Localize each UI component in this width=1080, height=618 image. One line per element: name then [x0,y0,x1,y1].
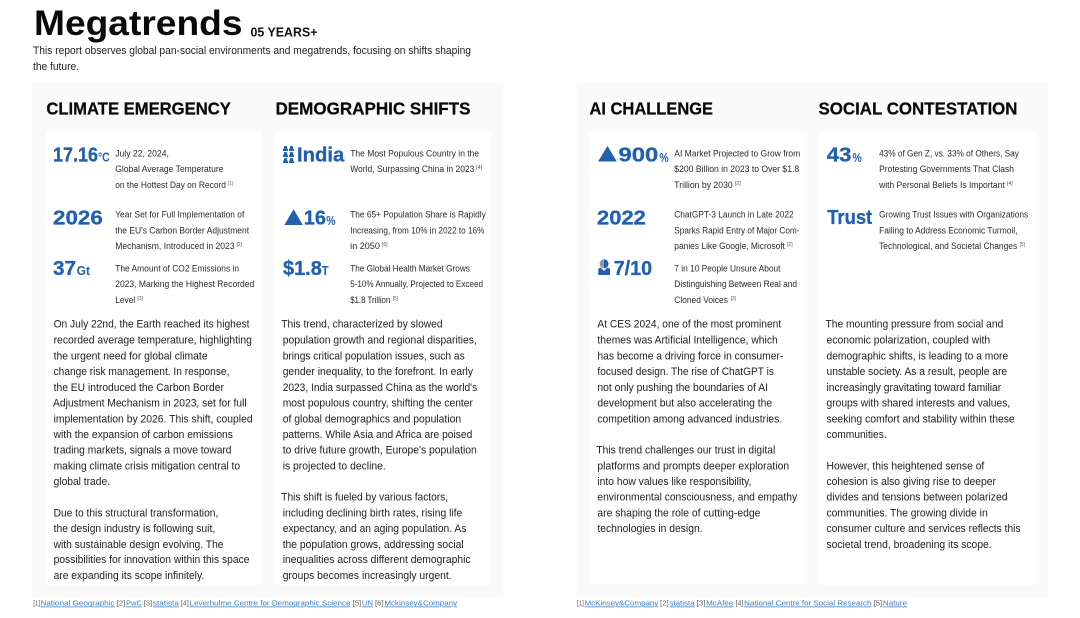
footnotes: left: [4] [181,598,189,608]
body text: demographic: population growth and regional disparities, [283,334,477,346]
stat: 1.8 trillion: [5] [393,296,398,302]
footnotes: left: [2] [117,598,125,608]
header [33,4,471,73]
body text: social: societal trend, broadening its scope. [826,539,992,551]
stat: 2022: ChatGPT-3 Launch in Late 2022 [674,210,794,220]
stat: 16 percent [284,206,486,251]
footnotes: left: PwC [126,598,142,608]
body text: social: However, this heightened sense of [826,460,985,472]
stat: 37 Gt: Level [115,295,135,305]
heading: social contestation: SOCIAL CONTESTATION [818,98,1018,118]
body text: demographic: 2023, India surpassed China as the world's [283,382,478,394]
stat: 17.16 degrees [53,144,233,190]
body text: demographic: to drive future growth, Europe's population [283,444,477,456]
stat: 17.16 degrees: 17.16 [53,144,98,166]
body text: demographic: groups becomes increasingly urgent. [283,570,452,582]
body text: AI: environmental consciousness, and empathy [597,492,798,504]
stat: 43 percent: [4] [1007,181,1013,187]
body text: demographic: gender inequality, to the forefront. In early [283,366,474,378]
stat: 37 Gt: 2023, Marking the Highest Recorded [115,279,254,289]
stat: 1.8 trillion: $1.8 Trillion [350,295,390,305]
stat: 1.8 trillion: $1.8 [283,257,322,280]
intro text: the future. [33,61,79,73]
body text: demographic: of global demographics and population [283,414,461,426]
stat: India: The Most Populous Country in the [350,148,479,158]
stat: 900 percent: AI Market Projected to Grow from [674,148,800,158]
body text: climate: are expanding its scope infinitely. [54,570,204,582]
stat: 16 percent: The 65+ Population Share is Rapidly [350,210,486,220]
footnotes: left: Leverhulme Centre for Demographic Science [190,598,350,608]
footnotes: right: McKinsey&Company [585,598,659,608]
stat: 43 percent: with Personal Beliefs Is Important [878,180,1005,190]
stat: 1.8 trillion: 5-10% Annually, Projected to Exceed [350,279,483,289]
body text: climate: change risk management. In response, [54,366,229,378]
stat: 16 percent: % [326,214,336,228]
footnotes: left: [3] [144,598,152,608]
stat: 17.16 degrees: [1] [228,181,233,187]
subtitle tag: 05 YEARS+ [250,26,318,40]
stat: 2022: 2022 [597,206,646,230]
body text: climate: Due to this structural transformation, [54,508,218,520]
card: AI challenge [589,132,807,584]
stat: 2022: Sparks Rapid Entry of Major Com- [674,226,800,236]
stat: 16 percent: in 2050 [350,241,380,251]
stat: 37 Gt: The Amount of CO2 Emissions in [115,264,239,274]
body text: demographic: is projected to decline. [283,460,386,472]
footnotes: right [577,598,907,608]
body text: AI: themes was Artificial Intelligence, which [597,334,778,346]
stat: 7 of 10 [598,257,797,305]
body text: climate: the urgent need for global climate [54,350,208,362]
stat: trust: Failing to Address Economic Turmoil, [879,226,1018,236]
stat: 7 of 10: 7/10 [614,257,652,280]
body text: social: consumer culture and services reflects this [826,523,1021,535]
stat: 2026: [2] [237,242,242,248]
body text: demographic: brings critical population issues, such as [283,350,465,362]
card: demographic shifts [275,132,491,585]
footnotes: left: [1] [33,598,40,608]
body text: climate: Adjustment Mechanism in 2023, set for full [53,398,247,410]
body text: climate: implementation by 2026. This shift, coupled [54,414,253,426]
heading: AI challenge: AI CHALLENGE [590,98,713,118]
stat: 16 percent: Increasing, from 10% in 2022 to 16% [350,226,485,236]
body text: demographic: including declining birth rates, rising life [283,508,462,520]
stat: India [283,144,483,174]
body text: social: increasingly gravitating toward familiar [826,382,1002,394]
icon: population grid [283,146,294,163]
stat: 900 percent [598,144,800,190]
body text: social: communities. [826,429,887,441]
body text: demographic: patterns. While Asia and Africa are poised [283,429,472,441]
footnotes: right: National Centre for Social Research [744,598,872,608]
stat: 7 of 10: [3] [731,296,736,302]
intro text [33,45,471,73]
footnotes: left: [5] [353,598,361,608]
body text: demographic [281,318,478,582]
stat: 900 percent: $200 Billion in 2023 to Over $1.8 [674,164,799,174]
footnotes: right: [4] [736,598,744,608]
stat: 17.16 degrees: °C [98,150,110,164]
stat: trust: Trust [827,206,872,229]
body text: climate [53,318,253,582]
footnotes: left: UN [362,598,373,608]
body text: AI: platforms and prompts deeper exploration [597,460,789,472]
heading: demographic shifts: DEMOGRAPHIC SHIFTS [276,98,470,118]
stat: 900 percent: [2] [735,181,741,187]
footnotes: right: Nature [883,598,907,608]
stat: 37 Gt: [3] [137,296,144,302]
stat: 900 percent: Trillion by 2030 [674,180,733,190]
stat: trust: Technological, and Societal Changes [879,241,1018,251]
body text: AI: At CES 2024, one of the most prominent [597,318,781,330]
body text: demographic: inequalities across different demographic [283,554,471,566]
body text: AI: development but also accelerating the [597,398,772,410]
icon: up triangle [598,146,617,162]
stat: trust: Growing Trust Issues with Organizations [879,210,1029,220]
stat: 2026: the EU's Carbon Border Adjustment [115,226,250,236]
body text: social: divides and tensions between polarized [826,492,1008,504]
panel: right group [577,83,1048,597]
stat: 37 Gt: 37 [53,257,76,280]
footnotes: right: [1] [577,598,584,608]
body text: AI: into how values like responsibility, [597,476,751,488]
stat: 2022: panies Like Google, Microsoft [674,241,786,251]
stat: 43 percent [827,144,1019,190]
stat: 43 percent: 43% of Gen Z, vs. 33% of Others, Say [879,148,1019,158]
footnotes: right: McAfee [706,598,733,608]
stat: India: [4] [476,165,483,171]
stat: 43 percent: Protesting Governments That Clash [879,164,1014,174]
stat: 2022: [2] [787,242,793,248]
body text: AI [596,318,798,535]
body text: AI: are shaping the role of cutting-edge [597,508,760,520]
footnotes: left: [6] [375,598,384,608]
footnotes: right: [2] [660,598,669,608]
body text: social: cohesion is also giving rise to deeper [826,476,996,488]
heading: climate emergency: CLIMATE EMERGENCY [46,98,231,118]
panel: left group [32,83,503,597]
stat: 37 Gt: Gt [77,264,91,278]
body text: climate: On July 22nd, the Earth reached its highest [54,318,249,330]
body text: AI: focused design. The rise of ChatGPT is [597,366,774,378]
body text: social: demographic shifts, is leading to a more [826,350,1008,362]
footnotes: left [33,598,457,608]
body text: social: The mounting pressure from social and [826,318,1003,330]
body text: climate: recorded average temperature, highlighting [54,334,252,346]
stat: 900 percent: % [659,151,669,165]
body text: AI: This trend challenges our trust in digital [596,444,775,456]
footnotes: right: [5] [874,598,882,608]
stat: 7 of 10: Cloned Voices [674,295,728,305]
body text: demographic: This trend, characterized by slowed [281,318,443,330]
body text: social: unstable society. As a result, people are [826,366,1007,378]
body text: demographic: the population grows, addressing social [283,539,464,551]
icon: up triangle [284,209,303,225]
stat: 17.16 degrees: July 22, 2024, [115,148,169,158]
body text: climate: with sustainable design evolving. The [53,539,224,551]
stat: 7 of 10: 7 in 10 People Unsure About [674,264,781,274]
stat: 900 percent: 900 [618,144,658,166]
body text: climate: global trade. [54,476,110,488]
body text: climate: trading markets, signals a move toward [54,444,231,456]
body text: demographic: This shift is fueled by various factors, [281,492,448,504]
stat: 2022 [597,206,800,251]
stat: 2026: Year Set for Full Implementation of [115,210,245,220]
body text: social: seeking comfort and stability within these [826,414,1015,426]
card: climate emergency [46,132,262,585]
footnotes: left: statista [153,598,180,608]
body text: social: communities. The growing divide in [826,508,988,520]
body text: climate: the EU introduced the Carbon Border [54,382,224,394]
stat: 1.8 trillion [283,257,483,305]
footnotes: right: [3] [697,598,705,608]
stat: 1.8 trillion: T [322,264,329,278]
stat: trust: [5] [1020,242,1025,248]
body text: AI: competition among advanced industries. [597,414,782,426]
body text: climate: the design industry is following suit, [54,523,215,535]
body text: social: groups with shared interests and values, [826,398,1010,410]
body text: AI: technologies in design. [597,523,703,535]
stat: 17.16 degrees: on the Hottest Day on Record [115,180,226,190]
stat: 1.8 trillion: The Global Health Market Grows [350,264,470,274]
stat: 43 percent: % [852,151,862,165]
stat: 37 Gt [53,257,254,305]
body text: AI: not only pushing the boundaries of AI [597,382,768,394]
stat: 17.16 degrees: Global Average Temperature [115,164,224,174]
stat: 2026: Mechanism, Introduced in 2023 [115,241,235,251]
stat: trust [827,206,1029,251]
stat: 16 percent: 16 [304,206,326,230]
intro text: This report observes global pan-social environments and megatrends, focusing on shifts shaping [33,45,471,57]
footnotes: right: statista [669,598,696,608]
body text: social: economic polarization, coupled with [826,334,990,346]
body text: social [826,318,1021,551]
icon: person [598,259,610,275]
body text: AI: has become a driving force in consumer- [597,350,784,362]
stat: 16 percent: [6] [382,242,388,248]
body text: climate: possibilities for innovation within this space [54,554,249,566]
body text: climate: making climate crisis mitigation central to [54,460,240,472]
card: social contestation [819,132,1036,585]
stat: 43 percent: 43 [827,144,851,166]
body text: demographic: most populous country, shifting the center [283,398,473,410]
title: Megatrends [34,4,242,43]
footnotes: left: National Geographic [40,598,115,608]
stat: 2026 [53,206,250,251]
footnotes: left: Mckinsey&Company [384,598,457,608]
stat: 7 of 10: Distinguishing Between Real and [674,279,797,289]
body text: demographic: expectancy, and an aging population. As [283,523,467,535]
body text: climate: with the expansion of carbon emissions [53,429,233,441]
stat: India: India [297,144,345,166]
stat: India: World, Surpassing China in 2023 [350,164,474,174]
stat: 2026: 2026 [53,206,103,230]
